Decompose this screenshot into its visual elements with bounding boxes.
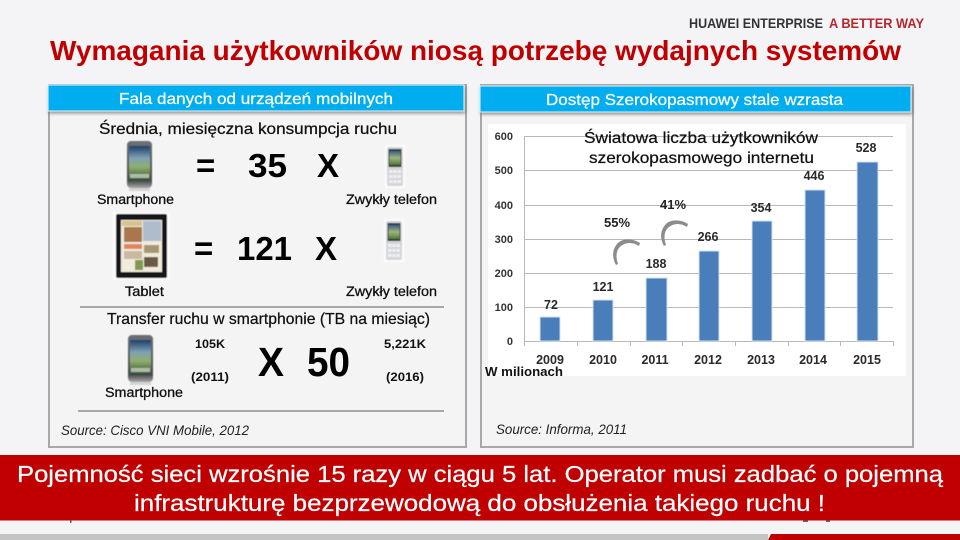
y axis labels — [495, 131, 513, 348]
equation: 121 times: X — [315, 230, 337, 267]
panel header: broadband: Dostęp Szerokopasmowy stale wzrasta — [546, 92, 843, 109]
growth: 55% — [604, 215, 640, 265]
figures: 2016 traffic: 5,221K — [384, 337, 426, 351]
data labels: 446 — [804, 169, 824, 183]
data labels: 528 — [856, 141, 876, 155]
y axis labels: 400 — [495, 200, 513, 212]
label: smartphone: Smartphone — [105, 385, 183, 400]
figures: 2011 traffic: 105K — [195, 337, 225, 351]
data labels: 188 — [646, 257, 666, 271]
logo: Huawei Enterprise: HUAWEI ENTERPRISE — [689, 15, 823, 31]
panel: mobile data wave — [48, 85, 466, 447]
source: Cisco: Source: Cisco VNI Mobile, 2012 — [61, 422, 249, 438]
data labels — [544, 141, 876, 312]
y axis labels: 0 — [507, 336, 513, 348]
y axis labels: 600 — [495, 131, 513, 143]
heading: traffic transfer: Transfer ruchu w smartphonie (TB na miesiąc) — [107, 311, 430, 328]
figures: 2016 traffic: (2016) — [386, 370, 424, 384]
bar chart: broadband users — [488, 124, 906, 376]
year labels: 2013 — [747, 353, 775, 367]
year labels — [536, 353, 881, 367]
multiplier: 50 times — [258, 339, 350, 385]
data labels: 354 — [751, 201, 771, 215]
data labels: 72 — [544, 298, 558, 312]
chart title: Światowa liczba użytkowników — [584, 128, 818, 147]
label: smartphone: Smartphone — [97, 192, 174, 207]
equation: 35 times: = — [196, 147, 215, 184]
icon: tablet — [113, 212, 170, 280]
equation: 121 times: 121 — [237, 230, 292, 267]
label: tablet: Tablet — [125, 284, 164, 299]
icon: smartphone — [127, 141, 152, 191]
panel header: broadband — [480, 86, 911, 112]
title: Wymagania użytkowników niosą potrzebę wydajnych systemów — [50, 35, 901, 66]
callout: capacity conclusion: infrastrukturę bezprzewodową do obsłużenia takiego ruchu ! — [134, 490, 825, 516]
callout: capacity conclusion: Pojemność sieci wzrośnie 15 razy w ciągu 5 lat. Operator musi zadbać o pojemną — [17, 461, 944, 487]
multiplier: 50 times: X — [258, 339, 284, 385]
y axis labels: 200 — [495, 268, 513, 280]
data labels: 121 — [593, 280, 613, 294]
logo: Huawei Enterprise — [689, 15, 925, 31]
equation: 35 times: 35 — [248, 147, 287, 184]
label: feature phone: Zwykły telefon — [346, 192, 437, 207]
panel header: mobile data: Fala danych od urządzeń mobilnych — [119, 91, 393, 108]
year labels: 2011 — [641, 353, 669, 367]
year labels: 2012 — [694, 353, 722, 367]
growth: 55%: 55% — [604, 215, 630, 230]
figures: 2016 traffic — [384, 337, 426, 384]
chart title: szerokopasmowego internetu — [589, 150, 814, 167]
year labels: 2015 — [853, 353, 881, 367]
bars — [540, 162, 878, 341]
figures: 2011 traffic: (2011) — [191, 370, 229, 384]
equation: 35 times: X — [317, 147, 339, 184]
growth: 41% — [660, 197, 688, 246]
year labels: 2014 — [799, 353, 827, 367]
panel: broadband access — [480, 85, 913, 447]
footer bar — [0, 534, 960, 540]
y axis labels: 300 — [495, 234, 513, 246]
year labels: 2010 — [589, 353, 617, 367]
y axis labels: 500 — [495, 165, 513, 177]
source: Informa: Source: Informa, 2011 — [496, 421, 627, 437]
equation: 121 times: = — [194, 230, 213, 267]
chart title — [584, 128, 818, 167]
logo: Huawei Enterprise: A BETTER WAY — [829, 15, 925, 31]
multiplier: 50 times: 50 — [307, 339, 350, 385]
equation: 35 times — [196, 147, 339, 184]
icon: smartphone — [128, 335, 153, 385]
label: feature phone: Zwykły telefon — [346, 284, 437, 299]
callout: capacity conclusion — [0, 455, 960, 520]
panel header: mobile data — [48, 85, 464, 111]
year labels: 2009 — [536, 353, 564, 367]
growth: 41%: 41% — [660, 197, 686, 212]
unit label: W milionach — [485, 364, 563, 379]
data labels: 266 — [698, 230, 718, 244]
icon: feature phone — [385, 145, 405, 188]
icon: feature phone — [384, 219, 404, 262]
y axis labels: 100 — [495, 302, 513, 314]
figures: 2011 traffic — [191, 337, 229, 384]
equation: 121 times — [194, 230, 337, 267]
heading: average consumption: Średnia, miesięczna konsumpcja ruchu — [99, 119, 397, 138]
